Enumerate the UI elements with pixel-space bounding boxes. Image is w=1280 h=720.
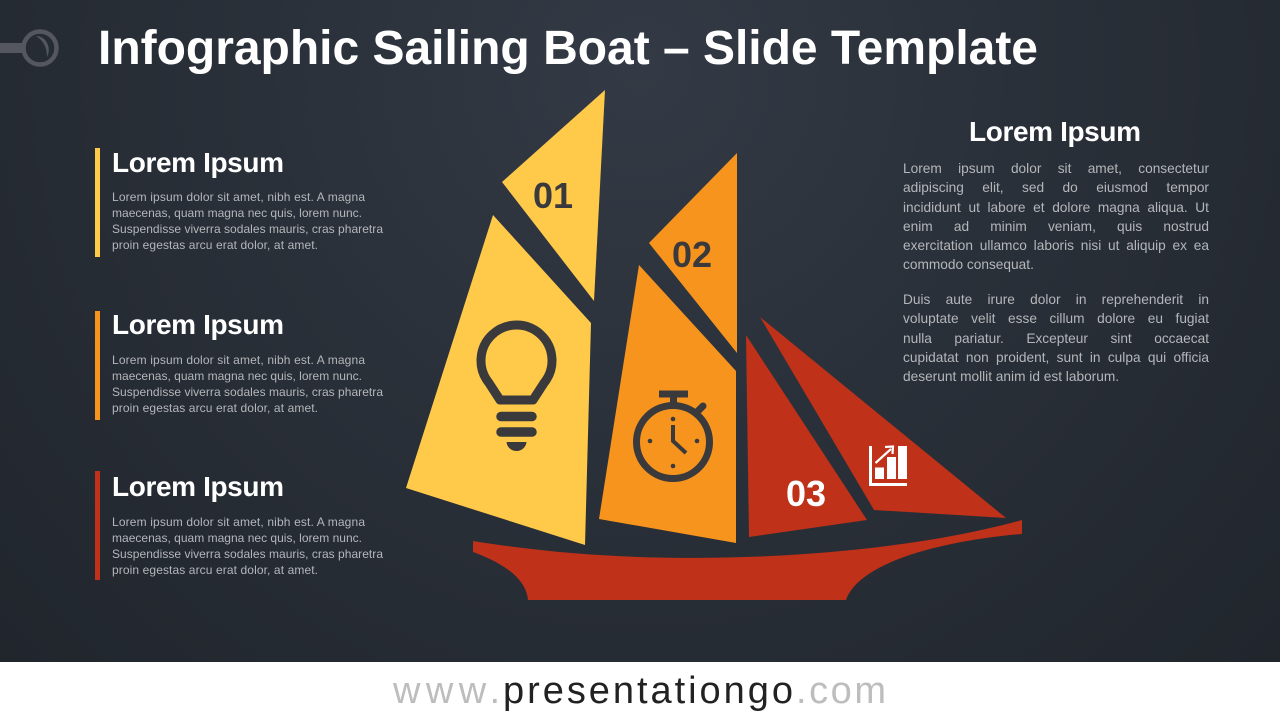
paragraph 2: nulla pariatur. Excepteur sint occaecat [903,331,1209,346]
text block 1: Lorem ipsum dolor sit amet, nibh est. A magna [112,190,365,204]
paragraph 1: commodo consequat. [903,257,1034,272]
accent bar orange [95,311,100,420]
icon: stopwatch [636,390,710,478]
icon: bar chart with arrow [869,446,907,486]
paragraph 2: cupidatat non proident, sunt in culpa qui officia [903,350,1209,365]
text block 3: Lorem ipsum dolor sit amet, nibh est. A magna [112,515,365,529]
text block 1: Suspendisse viverra sodales mauris, cras pharetra [112,222,383,236]
text block 2: Suspendisse viverra sodales mauris, cras pharetra [112,385,383,399]
paragraph 2: voluptate velit esse cillum dolore eu fugiat [903,311,1209,326]
text block 2: proin egestas arcu erat dolor, at amet. [112,401,318,415]
panel: left item 2 [95,309,383,420]
accent bar red [95,471,100,580]
paragraph 1: incididunt ut labore et dolore magna aliqua. Ut [903,200,1209,215]
sail: right red [760,317,1006,518]
sail: large yellow [406,215,591,545]
number 02: 02 [672,234,712,275]
text block 2 [112,353,383,415]
text block 1: maecenas, quam magna nec quis, lorem nunc. [112,206,362,220]
panel: left item 1 [95,147,383,257]
paragraph 1: adipiscing elit, sed do eiusmod tempor [903,180,1209,195]
panel: left item 3 [95,471,383,580]
footer band [0,662,1280,720]
footer website text: presentationgo [503,670,793,712]
text block 2: maecenas, quam magna nec quis, lorem nunc. [112,369,362,383]
title: Infographic Sailing Boat – Slide Template [98,22,1038,75]
accent bar yellow [95,148,100,257]
text block 1 [112,190,383,252]
sailing boat chart [406,90,1022,600]
text block 3 [112,515,383,577]
text block 3: Suspendisse viverra sodales mauris, cras pharetra [112,547,383,561]
text block 2: Lorem ipsum dolor sit amet, nibh est. A magna [112,353,365,367]
paragraph 2: Duis aute irure dolor in reprehenderit in [903,292,1209,307]
text block 1: proin egestas arcu erat dolor, at amet. [112,238,318,252]
paragraph 2: deserunt mollit anim id est laborum. [903,369,1119,384]
number 03: 03 [786,473,826,514]
heading 2: Lorem Ipsum [112,309,284,340]
paragraph 1: Lorem ipsum dolor sit amet, consectetur [903,161,1209,176]
icon: ship wheel logo mark [0,32,56,64]
hull [473,520,1022,600]
footer website text: www. [392,670,500,712]
text block 3: maecenas, quam magna nec quis, lorem nunc. [112,531,362,545]
sail: top yellow [502,90,605,301]
sail: large orange [599,265,736,543]
number 01: 01 [533,175,573,216]
sail: left red [746,335,867,537]
paragraph 2 [903,292,1209,384]
text block 3: proin egestas arcu erat dolor, at amet. [112,563,318,577]
heading 1: Lorem Ipsum [112,147,284,178]
paragraph 1: enim ad minim veniam, quis nostrud [903,219,1209,234]
paragraph 1 [903,161,1209,272]
footer website text: .com [796,670,886,712]
sail: top orange [649,153,737,353]
footer website text [392,670,886,712]
paragraph 1: exercitation ullamco laboris nisi ut aliquip ex ea [903,238,1209,253]
right heading: Lorem Ipsum [969,116,1141,147]
icon: light bulb [481,325,552,451]
heading 3: Lorem Ipsum [112,471,284,502]
